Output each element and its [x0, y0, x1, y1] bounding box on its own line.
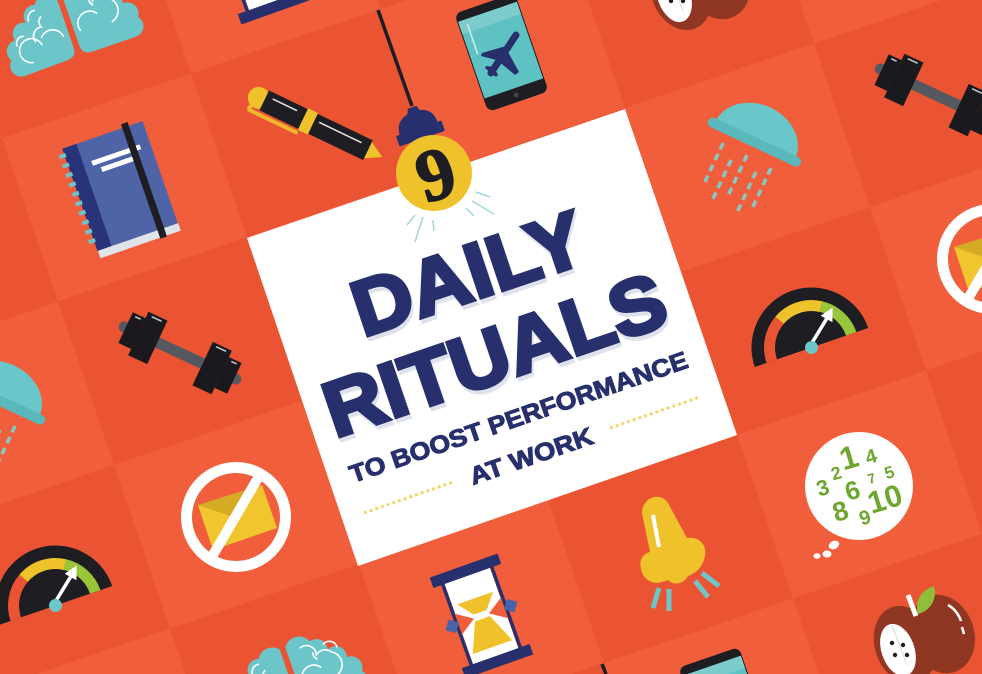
- icon copy: no email right: [942, 210, 982, 308]
- subtitle: TO BOOST PERFORMANCE: [346, 347, 692, 489]
- icon: numbers thought bubble: 1: [835, 438, 863, 477]
- icon: phone with plane: [454, 0, 549, 112]
- icon: brain: [0, 0, 147, 80]
- icon copy: shower left: [0, 344, 61, 488]
- title: DAILY: [342, 198, 598, 357]
- icon: numbers thought bubble: [805, 432, 913, 559]
- icon: pen: [242, 82, 388, 171]
- icon: apple: [864, 586, 982, 674]
- icon: numbers thought bubble: 10: [863, 477, 907, 521]
- icon copy: brain bottom: [215, 619, 371, 674]
- subtitle: AT WORK: [466, 423, 597, 491]
- title: RITUALS: [314, 260, 679, 458]
- icon copy: apple top: [640, 0, 761, 39]
- icon: numbers thought bubble: 8: [829, 495, 852, 528]
- title: [312, 194, 679, 458]
- icon copy: dumbbell right: [865, 45, 982, 145]
- icon: numbers thought bubble: 9: [857, 506, 874, 530]
- icon: light bulb number 9: 9: [406, 130, 466, 220]
- icon: no email: [186, 468, 286, 566]
- icon: numbers thought bubble: 3: [813, 474, 832, 502]
- icon copy: gauge left: [0, 529, 114, 631]
- icon: hourglass: [427, 553, 536, 674]
- icon: gauge: [735, 271, 870, 373]
- panel: white title card: [247, 109, 737, 566]
- icon: numbers thought bubble: 4: [863, 445, 881, 469]
- icon: shower: [677, 86, 817, 230]
- icon copy: hourglass top: [203, 0, 312, 25]
- icon: notebook: [56, 117, 181, 261]
- dotted lines: [364, 397, 700, 513]
- wire bottom fragment: [602, 664, 606, 674]
- icon: dumbbell: [109, 303, 251, 403]
- icon: numbers thought bubble: 5: [882, 462, 897, 483]
- icon: numbers thought bubble: 6: [841, 474, 864, 507]
- icon: numbers thought bubble: 7: [865, 469, 878, 487]
- title: RITUALS: [312, 256, 677, 454]
- icon: numbers thought bubble: 2: [829, 462, 844, 484]
- icon copy: phone bottom: [678, 647, 773, 674]
- icon: nose: [640, 497, 719, 611]
- title: DAILY: [340, 194, 596, 353]
- icon: light bulb number 9: [378, 10, 494, 242]
